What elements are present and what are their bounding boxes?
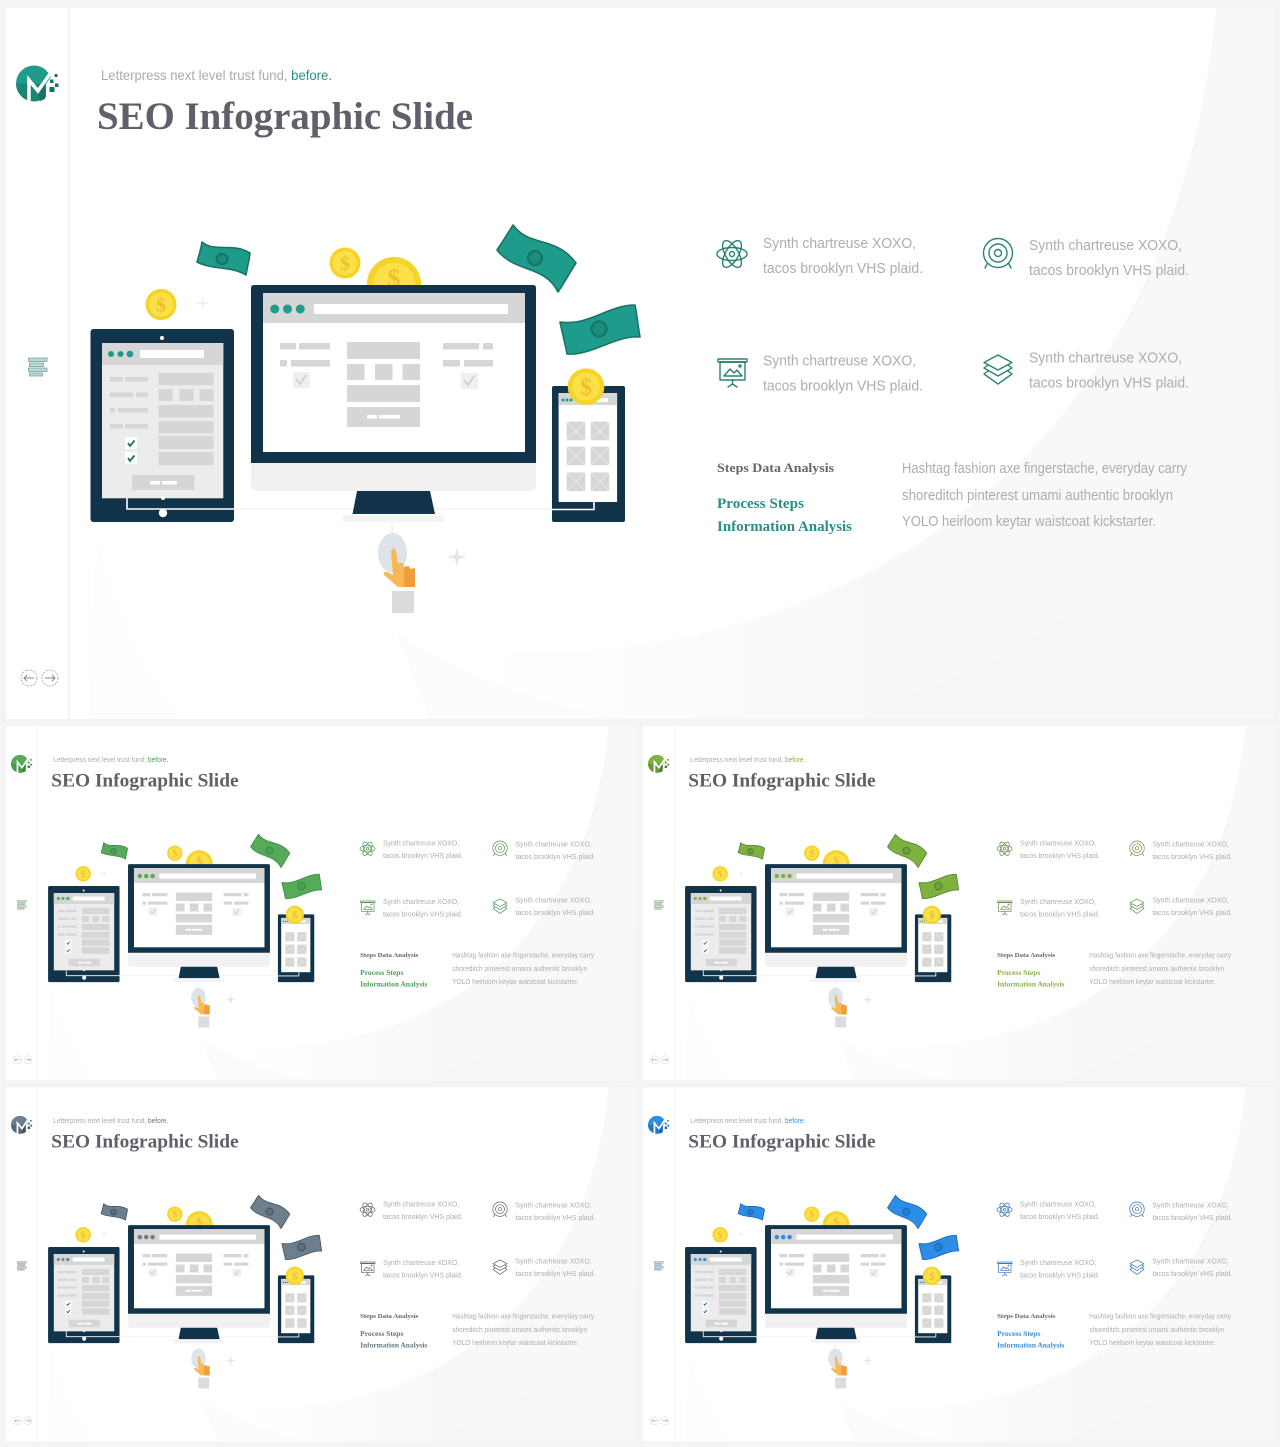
text: tagline: Letterpress next level trust fund, before. [53,1118,168,1125]
text items: tacos brooklyn VHS plaid. [383,910,463,919]
headings: Information Analysis [997,1342,1064,1350]
headings: Information Analysis [997,981,1064,989]
headings [997,1313,1064,1350]
text: tacos brooklyn VHS plaid. [763,261,923,277]
icon: presentation board [718,359,747,387]
heading: process steps: Process Steps [717,496,804,512]
text: tacos brooklyn VHS plaid. [763,378,923,394]
text block: description: shoreditch pinterest umami authentic brooklyn [452,964,587,973]
text items: Synth chartreuse XOXO, [383,897,459,906]
phone: $ [580,375,592,401]
text items: Synth chartreuse XOXO, [515,840,592,849]
text items: tacos brooklyn VHS plaid. [515,1213,595,1222]
icon: atom [717,238,747,270]
icon: coins [146,248,421,320]
text: tagline: Letterpress next level trust fund, before. [53,757,168,764]
text items: Synth chartreuse XOXO, [515,896,592,905]
icon: sparkle large [447,547,467,567]
headings: Steps Data Analysis [360,952,419,959]
icon: bills [197,225,640,354]
text items: tacos brooklyn VHS plaid. [1020,910,1100,919]
text block: description: shoreditch pinterest umami authentic brooklyn [1089,1325,1224,1334]
icon: mouse and hand [378,522,415,613]
text: tagline: Letterpress next level trust fund, before. [690,1118,805,1125]
item: presentation [718,354,923,394]
icons [997,1202,1144,1276]
logo [16,64,58,102]
text: tagline: Letterpress next level trust fund, before. [101,67,332,83]
text items: Synth chartreuse XOXO, [1020,897,1096,906]
heading: process steps: Information Analysis [717,519,852,535]
illustration [48,834,322,1027]
item: atom [717,236,923,277]
text block: description: Hashtag fashion axe fingerstache, everyday carry [902,461,1188,477]
item: target [984,238,1189,279]
headings [360,1313,427,1350]
heading: title: SEO Infographic Slide [688,1131,876,1152]
icons [360,1202,507,1276]
text items: tacos brooklyn VHS plaid. [515,908,595,917]
icons [360,841,507,915]
illustration [685,1195,959,1388]
text block: description [1089,951,1231,986]
panel: small slide, slate [6,1087,637,1441]
heading: title: SEO Infographic Slide [688,770,876,791]
headings: Steps Data Analysis [997,1313,1056,1320]
text items: tacos brooklyn VHS plaid. [515,852,595,861]
icons [997,841,1144,915]
text items: Synth chartreuse XOXO, [1020,1200,1096,1209]
icon: layers [984,355,1012,384]
panel: small slide, green [6,726,637,1080]
icon: target [984,238,1012,268]
text items: tacos brooklyn VHS plaid. [1020,1271,1100,1280]
text block: description [902,461,1188,530]
text block: description: Hashtag fashion axe fingerstache, everyday carry [1089,951,1231,960]
text items: tacos brooklyn VHS plaid. [1152,1213,1232,1222]
text block: description: shoreditch pinterest umami authentic brooklyn [452,1325,587,1334]
headings: Process Steps [997,969,1041,977]
heading: title: SEO Infographic Slide [51,1131,239,1152]
item: layers [984,350,1189,392]
text block: description: YOLO heirloom keytar waistcoat kickstarter. [452,1338,579,1347]
text items [383,1200,595,1280]
text items: Synth chartreuse XOXO, [383,1200,459,1209]
headings: Steps Data Analysis [360,1313,419,1320]
icon: coins: $ [156,294,166,316]
text items: tacos brooklyn VHS plaid. [1020,1212,1100,1221]
illustration [685,834,959,1027]
panel: small slide, lime [643,726,1274,1080]
text items: Synth chartreuse XOXO, [1152,1257,1229,1266]
text block: description: YOLO heirloom keytar waistcoat kickstarter. [902,514,1156,530]
illustration [48,1195,322,1388]
headings [360,952,427,989]
heading: process steps [717,496,852,535]
text: tacos brooklyn VHS plaid. [1029,376,1189,392]
icon: side menu [28,358,47,376]
text items: tacos brooklyn VHS plaid. [1020,851,1100,860]
text items: Synth chartreuse XOXO, [515,1257,592,1266]
icon: coins: $ [388,264,400,293]
icon: coins: $ [340,253,350,275]
panel: main slide, teal [6,8,1274,719]
text items: Synth chartreuse XOXO, [383,1258,459,1267]
text block: description: YOLO heirloom keytar waistcoat kickstarter. [1089,1338,1216,1347]
text items [1020,839,1232,919]
base line [234,508,552,510]
text items: tacos brooklyn VHS plaid. [1152,852,1232,861]
text block: description: Hashtag fashion axe fingerstache, everyday carry [452,951,594,960]
text block: description: Hashtag fashion axe fingerstache, everyday carry [452,1312,594,1321]
text items: tacos brooklyn VHS plaid. [515,1269,595,1278]
headings: Process Steps [360,1330,404,1338]
text [763,354,923,394]
text: Synth chartreuse XOXO, [1029,238,1182,254]
headings: Process Steps [997,1330,1041,1338]
text: Synth chartreuse XOXO, [1029,350,1182,366]
text items: tacos brooklyn VHS plaid. [1152,908,1232,917]
text items [383,839,595,919]
heading: title: SEO Infographic Slide [51,770,239,791]
panel: small slide, blue [643,1087,1274,1441]
text block: description: YOLO heirloom keytar waistcoat kickstarter. [1089,977,1216,986]
text items: Synth chartreuse XOXO, [515,1201,592,1210]
text items [1020,1200,1232,1280]
text: Synth chartreuse XOXO, [763,354,916,370]
icon: sparkle small [196,296,210,310]
heading: steps data analysis: Steps Data Analysis [717,460,834,475]
tablet [90,329,234,522]
text block: description [1089,1312,1231,1347]
text items: Synth chartreuse XOXO, [1152,896,1229,905]
text items: tacos brooklyn VHS plaid. [383,1212,463,1221]
text items: tacos brooklyn VHS plaid. [383,851,463,860]
monitor [251,285,536,522]
headings: Information Analysis [360,981,427,989]
text block: description: Hashtag fashion axe fingerstache, everyday carry [1089,1312,1231,1321]
text items: tacos brooklyn VHS plaid. [383,1271,463,1280]
text: tacos brooklyn VHS plaid. [1029,263,1189,279]
icon: navigation arrows [21,670,58,686]
text block: description: shoreditch pinterest umami authentic brooklyn [902,488,1173,504]
text block: description: shoreditch pinterest umami authentic brooklyn [1089,964,1224,973]
text items: Synth chartreuse XOXO, [383,839,459,848]
text items: Synth chartreuse XOXO, [1020,1258,1096,1267]
headings [997,952,1064,989]
text: tagline: Letterpress next level trust fund, before. [690,757,805,764]
slide background [6,8,1274,719]
text [1029,238,1189,279]
headings: Steps Data Analysis [997,952,1056,959]
text block: description [452,951,594,986]
text items: tacos brooklyn VHS plaid. [1152,1269,1232,1278]
illustration: devices and money [90,225,640,613]
headings: Process Steps [360,969,404,977]
text block: description: YOLO heirloom keytar waistcoat kickstarter. [452,977,579,986]
text items: Synth chartreuse XOXO, [1020,839,1096,848]
text items: Synth chartreuse XOXO, [1152,840,1229,849]
headings: Information Analysis [360,1342,427,1350]
heading: title: SEO Infographic Slide [97,95,473,138]
text block: description [452,1312,594,1347]
text [1029,350,1189,392]
text items: Synth chartreuse XOXO, [1152,1201,1229,1210]
text [763,236,923,277]
text: Synth chartreuse XOXO, [763,236,916,252]
phone [552,368,625,522]
